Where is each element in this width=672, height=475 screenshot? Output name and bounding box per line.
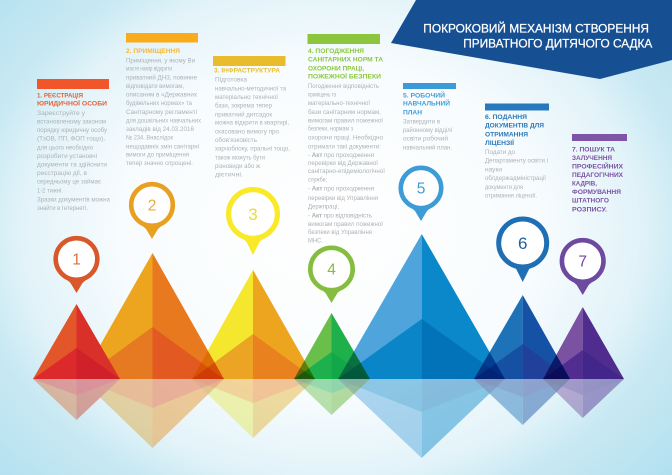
step 2 text panel: маєте намір відкрити xyxy=(126,65,172,73)
step 2 text panel xyxy=(126,33,202,167)
step 2 text panel: для дошкільних навчальних xyxy=(126,116,202,124)
step 3 text panel: різновиди або ж xyxy=(215,162,261,170)
pyramid 7 xyxy=(543,307,624,379)
step 4 text panel: санітарно-епідеміологічної xyxy=(308,167,385,175)
step 1 text panel: реєстрацію дії, в xyxy=(37,169,88,177)
step 4 text panel xyxy=(308,34,385,244)
step 4 text panel: САНІТАРНИХ НОРМ ТА xyxy=(308,57,383,64)
step 4 text panel: Погодження відповідність xyxy=(308,82,380,90)
pin 5 xyxy=(401,168,441,221)
pin 2 xyxy=(131,184,173,239)
step 1 text panel: середньому це займає xyxy=(37,177,102,185)
step 7 text panel: КАДРІВ, xyxy=(572,181,597,188)
step 4 text panel: МНС. xyxy=(308,237,323,244)
step 7 text panel: РОЗПИСУ. xyxy=(572,206,607,213)
step 2 text panel: тепер значно спрощені. xyxy=(126,159,193,167)
step 3 text panel: матеріально технічної xyxy=(215,93,278,101)
step 4 text panel: безпеки від Управління xyxy=(308,228,372,236)
step 4 text panel: бази санітарним нормам, xyxy=(308,108,381,116)
pin 4 xyxy=(310,248,353,303)
step 4 text panel: отримати такі документи: xyxy=(308,142,381,150)
step 4 text panel: вимогам правил пожежної xyxy=(308,117,383,124)
step 2 text panel: 2. ПРИМІЩЕННЯ xyxy=(126,48,180,55)
step 7 text panel: ШТАТНОГО xyxy=(572,198,609,205)
pin 1: 1 xyxy=(72,252,81,269)
step 3 text panel: приватний дитсадок xyxy=(215,110,272,118)
step 7 text panel: ФОРМУВАННЯ xyxy=(572,189,621,196)
step 6 text panel xyxy=(485,104,549,200)
step 2 text panel: будівельних нормах» та xyxy=(126,99,192,107)
step 4 text panel: перевірки від Державної xyxy=(308,159,378,167)
title banner xyxy=(391,0,672,79)
pin 1 xyxy=(56,238,97,293)
step 3 text panel: також можуть бути xyxy=(215,154,265,162)
step 4 text panel: - Акт про проходження xyxy=(308,186,374,193)
step 5 text panel: 5. РОБОЧИЙ xyxy=(403,90,445,99)
step 3 text panel: навчально-методичної та xyxy=(215,85,286,92)
step 1 text panel: встановленому законом xyxy=(37,118,106,125)
step 6 text panel: ОТРИМАННЯ xyxy=(485,131,528,138)
step 1 text panel: знайти в Інтернеті. xyxy=(37,204,88,212)
step 3 text panel: харчоблоку, пральні тощо, xyxy=(215,145,290,153)
pin 7: 7 xyxy=(578,254,587,271)
step 5 text panel: НАВЧАЛЬНИЙ xyxy=(403,99,450,108)
step 5 text panel: освіти робочий xyxy=(403,135,448,143)
pyramid 4 xyxy=(294,313,370,379)
step 6 text panel: облдержадміністрації xyxy=(485,174,546,182)
step 6 text panel: Департаменту освіти і xyxy=(485,157,548,165)
step 7 text panel: 7. ПОШУК ТА xyxy=(572,146,615,153)
step 1 text panel: ЮРИДИЧНОЇ ОСОБИ xyxy=(37,100,107,108)
step 5 text panel: Затвердити в xyxy=(403,118,441,125)
step 4 text panel: матеріально-технічної xyxy=(308,99,370,107)
pin 3: 3 xyxy=(248,205,258,224)
step 6 text panel: Подати до xyxy=(485,149,515,156)
pin 5: 5 xyxy=(417,181,425,198)
pyramids row xyxy=(33,234,624,379)
step 1 text panel: 1-2 тижні. xyxy=(37,186,63,194)
step 1 text panel: (ТзОВ, ПП, ФОП тощо), xyxy=(37,135,105,142)
pyramid 2 xyxy=(81,253,224,379)
step 6 text panel: отримання ліцензії. xyxy=(485,192,537,200)
step 2 text panel: закладів від 24.03.2016 xyxy=(126,125,194,133)
step 6 text panel: 6. ПОДАННЯ xyxy=(485,114,527,121)
step 3 text panel: Підготовка xyxy=(215,75,248,83)
step 3 text panel: скасовано вимогу про xyxy=(215,128,279,135)
step 2 text panel: Приміщення, у якому Ви xyxy=(126,56,195,64)
step 2 text panel: описаним в «Державних xyxy=(126,91,198,98)
step 3 text panel xyxy=(213,56,290,179)
step 7 text panel xyxy=(572,134,627,213)
step 1 text panel: розробити установчі xyxy=(37,152,97,160)
step 7 text panel: ЗАЛУЧЕННЯ xyxy=(572,155,612,162)
pyramid 3 xyxy=(192,270,315,379)
pyramid 5 xyxy=(338,234,505,379)
step 6 text panel: ЛІЦЕНЗІЇ xyxy=(485,139,514,147)
pyramid 6 xyxy=(474,295,570,379)
step 5 text panel: ПЛАН xyxy=(403,110,422,117)
pin 7 xyxy=(562,240,604,295)
step 5 text panel: районному відділі xyxy=(403,126,452,134)
pin 3 xyxy=(229,190,277,255)
step 7 text panel: ПРОФЕСІЙНИХ xyxy=(572,161,624,170)
step 1 text panel: документи та здійснити xyxy=(37,161,107,169)
step 4 text panel: 4. ПОГОДЖЕННЯ xyxy=(308,48,364,55)
step 6 text panel: документи для xyxy=(485,184,523,191)
step 4 text panel: безпеки, нормам з xyxy=(308,125,353,133)
step 4 text panel: служби; xyxy=(308,176,327,184)
step 1 text panel: Зареєструйте у xyxy=(37,109,86,117)
pin 6 xyxy=(499,219,547,282)
step 2 text panel: Санітарному регламенті xyxy=(126,108,197,116)
pyramid 1 xyxy=(33,304,120,379)
step 5 text panel: навчальний план. xyxy=(403,143,452,151)
step 2 text panel: вимоги до приміщення xyxy=(126,151,189,159)
step 3 text panel: бази, зокрема тепер xyxy=(215,102,272,110)
step 3 text panel: можна відкрити в квартирі, xyxy=(215,119,289,127)
step 2 text panel: відповідати вимогам, xyxy=(126,82,184,90)
step 7 text panel: ПЕДАГОГІЧНИХ xyxy=(572,172,624,179)
reflection of pyramids xyxy=(33,379,624,458)
step 3 text panel: дієтичні. xyxy=(215,171,243,179)
step 4 text panel: вимогам правил пожежної xyxy=(308,221,383,228)
title banner: ПОКРОКОВИЙ МЕХАНІЗМ СТВОРЕННЯ xyxy=(423,20,649,35)
step 1 text panel: порядку юридичну особу xyxy=(37,126,108,134)
title banner: ПРИВАТНОГО ДИТЯЧОГО САДКА xyxy=(463,37,653,51)
step 4 text panel: перевірки від Управління xyxy=(308,194,378,202)
step 4 text panel: ОХОРОНИ ПРАЦІ, xyxy=(308,65,364,72)
pin 6: 6 xyxy=(518,234,527,253)
step 6 text panel: науки xyxy=(485,166,502,173)
step 5 text panel xyxy=(403,83,456,151)
step 2 text panel: приватний ДНЗ, повинне xyxy=(126,73,197,81)
step 2 text panel: нещодавніх змін санітарні xyxy=(126,142,199,150)
step 3 text panel: обов'язковість xyxy=(215,136,258,144)
pin 4: 4 xyxy=(327,262,336,279)
step 1 text panel: для цього необхідно xyxy=(37,143,93,151)
step 2 text panel: № 234. Внаслідок xyxy=(126,134,173,142)
step 4 text panel: - Акт про проходження xyxy=(308,152,374,159)
step 4 text panel: ПОЖЕЖНОЇ БЕЗПЕКИ xyxy=(308,73,381,81)
step 3 text panel: 3. ІНФРАСТРУКТУРА xyxy=(214,67,280,74)
step 1 text panel: Зразки документів можна xyxy=(37,195,110,203)
step 4 text panel: - Акт про відповідність xyxy=(308,211,373,219)
step 6 text panel: ДОКУМЕНТІВ ДЛЯ xyxy=(485,123,544,130)
step 4 text panel: Держпраці; xyxy=(308,202,339,210)
step 4 text panel: приміщень та xyxy=(308,90,336,98)
step 1 text panel xyxy=(37,79,110,212)
pin 2: 2 xyxy=(148,198,156,215)
step 1 text panel: 1. РЕЄСТРАЦІЯ xyxy=(37,92,83,99)
step 4 text panel: охорони праці. Необхідно xyxy=(308,134,383,142)
